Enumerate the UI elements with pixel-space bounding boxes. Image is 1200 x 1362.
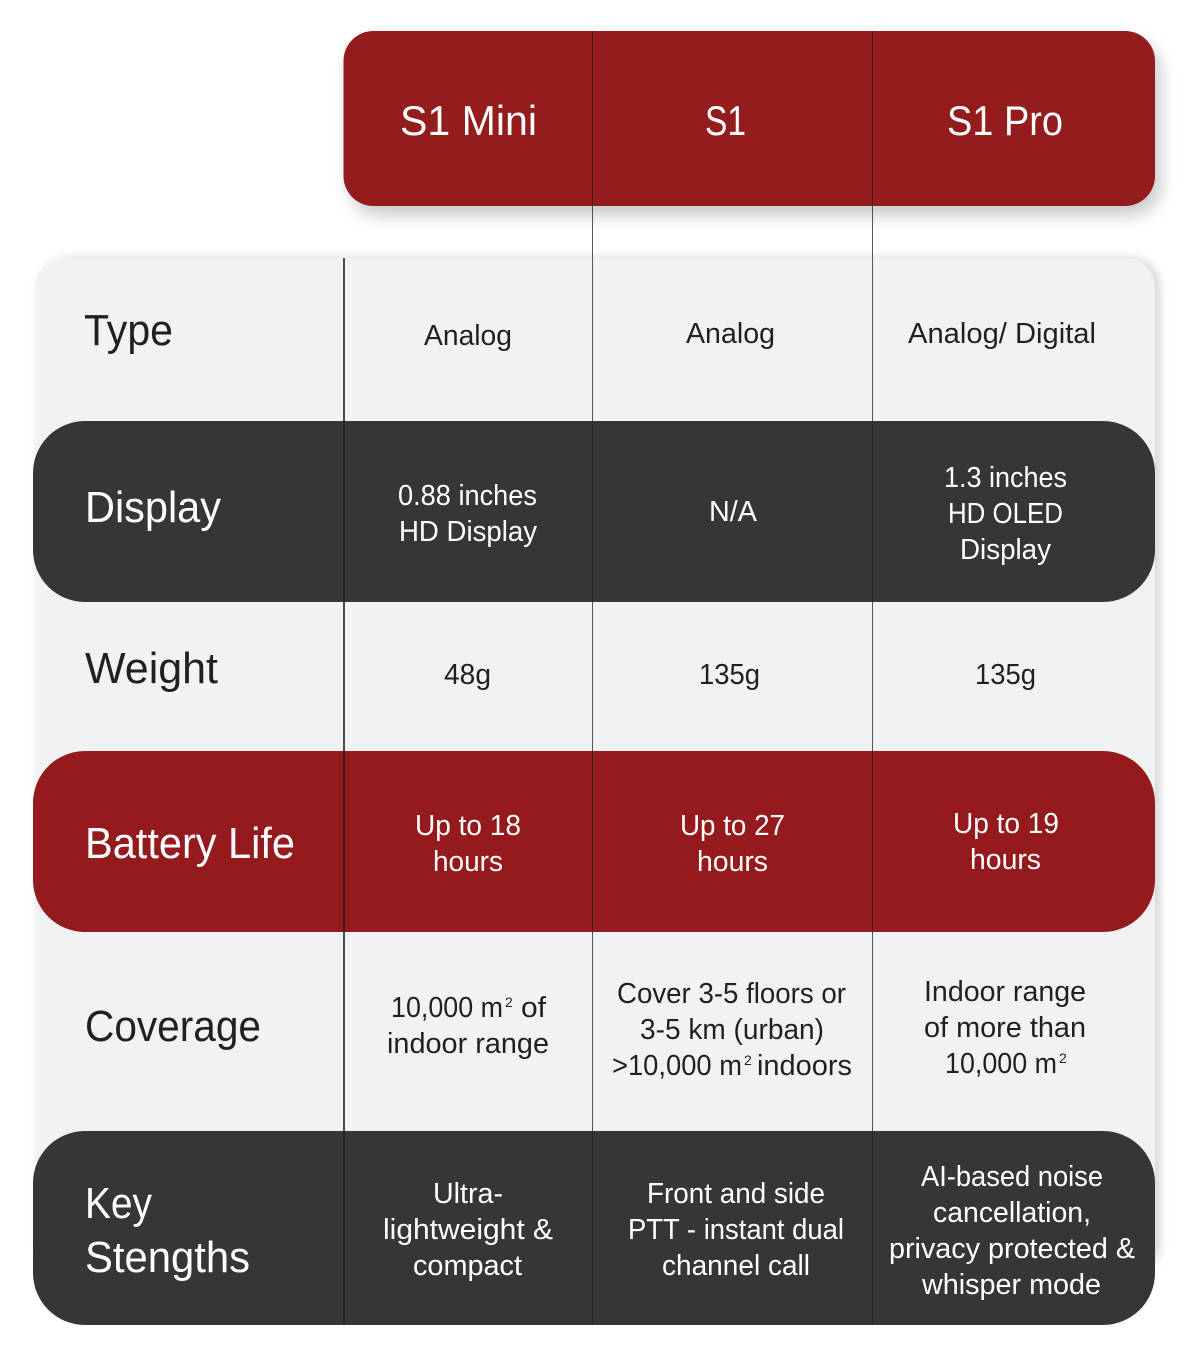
value: S1 Pro display: Display bbox=[960, 534, 1051, 566]
value: S1 Pro display bbox=[944, 462, 1067, 566]
label: Key Stengths bbox=[85, 1179, 250, 1282]
row band: Battery Life bbox=[33, 751, 1155, 932]
value: S1 Pro coverage: Indoor range bbox=[924, 976, 1086, 1008]
value: S1 Mini strengths: Ultra- bbox=[433, 1178, 503, 1210]
value: S1 Pro coverage: of more than bbox=[924, 1012, 1086, 1044]
value: S1 Mini strengths: lightweight & bbox=[383, 1214, 553, 1246]
value: S1 Pro weight: 135g bbox=[975, 659, 1036, 691]
label: Display: Display bbox=[85, 483, 221, 532]
value: S1 coverage: 3-5 km (urban) bbox=[640, 1014, 824, 1046]
value: S1 Mini display: HD Display bbox=[399, 516, 537, 548]
label: Key Stengths: Key bbox=[85, 1179, 152, 1228]
row: Coverage bbox=[85, 976, 1086, 1082]
value: S1 Mini coverage: 10,000 m bbox=[391, 992, 503, 1024]
panel: comparison table background bbox=[35, 258, 1155, 1273]
value: S1 type: Analog bbox=[686, 318, 775, 350]
value: S1 coverage: >10,000 m bbox=[612, 1050, 742, 1082]
value: S1 Pro coverage bbox=[924, 976, 1086, 1080]
value: S1 strengths: PTT - instant dual bbox=[628, 1214, 844, 1246]
value: S1 Mini strengths bbox=[383, 1178, 553, 1282]
value: S1 coverage bbox=[612, 978, 852, 1082]
row band: Display bbox=[33, 421, 1155, 602]
value: S1 Pro coverage: 2 bbox=[1059, 1050, 1067, 1066]
label: Weight: Weight bbox=[85, 644, 218, 693]
label: Battery Life: Battery Life bbox=[85, 819, 295, 868]
value: S1 Mini display bbox=[398, 480, 537, 548]
value: S1 Pro coverage: 10,000 m bbox=[945, 1048, 1057, 1080]
value: S1 strengths bbox=[628, 1178, 844, 1282]
value: S1 Mini coverage: 2 bbox=[505, 994, 513, 1010]
value: S1 battery bbox=[680, 810, 785, 878]
value: S1 Mini battery bbox=[415, 810, 521, 878]
value: S1 Pro display: HD OLED bbox=[948, 498, 1063, 530]
value: S1 Pro strengths: whisper mode bbox=[921, 1269, 1101, 1301]
row: Display bbox=[85, 462, 1067, 566]
value: S1 battery: hours bbox=[697, 846, 768, 878]
heading: S1 Pro: S1 Pro bbox=[947, 97, 1063, 144]
value: S1 coverage: indoors bbox=[757, 1050, 852, 1082]
value: S1 battery: Up to 27 bbox=[680, 810, 785, 842]
heading: S1: S1 bbox=[705, 97, 746, 144]
value: S1 Pro battery: hours bbox=[970, 844, 1041, 876]
row: Key Strengths bbox=[85, 1161, 1135, 1301]
value: S1 weight: 135g bbox=[699, 659, 760, 691]
heading: S1 Mini: S1 Mini bbox=[400, 97, 537, 144]
value: S1 Mini strengths: compact bbox=[413, 1250, 522, 1282]
value: S1 coverage: 2 bbox=[744, 1052, 752, 1068]
row: Type bbox=[84, 306, 1096, 355]
label: Coverage: Coverage bbox=[85, 1002, 261, 1051]
value: S1 Mini type: Analog bbox=[424, 320, 512, 352]
value: S1 Pro strengths bbox=[889, 1161, 1135, 1301]
value: S1 Mini coverage bbox=[387, 992, 549, 1060]
value: S1 strengths: channel call bbox=[662, 1250, 810, 1282]
value: S1 Pro display: 1.3 inches bbox=[944, 462, 1067, 494]
row band: Key Strengths bbox=[33, 1131, 1155, 1325]
value: S1 Mini battery: hours bbox=[433, 846, 503, 878]
value: S1 Pro battery bbox=[953, 808, 1059, 876]
value: S1 Pro strengths: cancellation, bbox=[933, 1197, 1091, 1229]
value: S1 Mini coverage: indoor range bbox=[387, 1028, 549, 1060]
value: S1 display: N/A bbox=[709, 496, 758, 528]
value: S1 strengths: Front and side bbox=[647, 1178, 825, 1210]
value: S1 Mini weight: 48g bbox=[444, 659, 491, 691]
label: Type: Type bbox=[84, 306, 173, 355]
row: Weight bbox=[85, 644, 1036, 693]
value: S1 Pro battery: Up to 19 bbox=[953, 808, 1059, 840]
value: S1 Pro type: Analog/ Digital bbox=[908, 318, 1096, 350]
value: S1 coverage: Cover 3-5 floors or bbox=[617, 978, 846, 1010]
value: S1 Mini coverage: of bbox=[521, 992, 547, 1024]
value: S1 Pro strengths: AI-based noise bbox=[921, 1161, 1103, 1193]
row: Battery Life bbox=[85, 808, 1059, 878]
value: S1 Mini display: 0.88 inches bbox=[398, 480, 537, 512]
value: S1 Mini battery: Up to 18 bbox=[415, 810, 521, 842]
value: S1 Pro strengths: privacy protected & bbox=[889, 1233, 1135, 1265]
label: Key Stengths: Stengths bbox=[85, 1233, 250, 1282]
header band: model names bbox=[344, 31, 1155, 206]
